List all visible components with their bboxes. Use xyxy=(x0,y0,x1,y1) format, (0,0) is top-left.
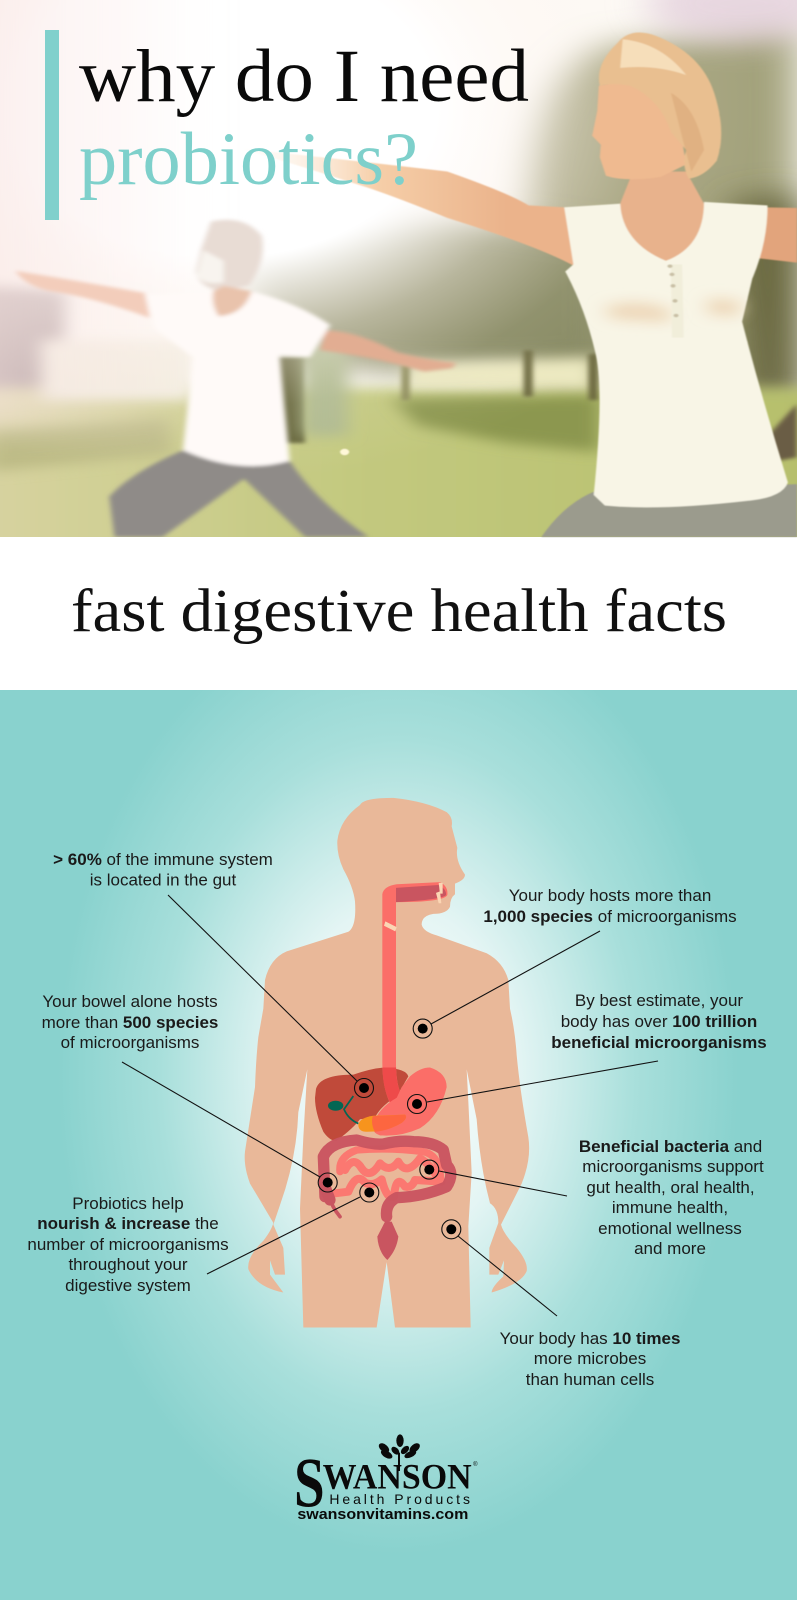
fact: 100 trillion: beneficial microorganisms xyxy=(551,1033,767,1052)
human body illustration xyxy=(245,798,529,1327)
logo: Swanson Health Products: Health Products xyxy=(329,1491,470,1507)
pancreas xyxy=(358,1115,406,1132)
fact: 10 times microbes: more microbes xyxy=(534,1349,646,1368)
rectum xyxy=(377,1222,398,1260)
marker targets xyxy=(318,1019,461,1239)
heading: probiotics?: probiotics? xyxy=(79,118,418,201)
fact: beneficial bacteria: and more xyxy=(634,1239,706,1258)
photo background: grass and trees xyxy=(0,17,797,537)
panel: digestive health diagram xyxy=(0,690,797,1600)
fact: beneficial bacteria: gut health, oral health, xyxy=(586,1178,755,1197)
fact: beneficial bacteria: microorganisms support xyxy=(582,1157,764,1176)
liver xyxy=(315,1067,408,1141)
fact: 1,000 species: Your body hosts more than xyxy=(509,886,711,905)
fact: 10 times microbes: than human cells xyxy=(526,1370,654,1389)
logo: Swanson Health Products: WANSON xyxy=(323,1456,472,1496)
esophagus and mouth xyxy=(382,882,447,1103)
logo: Swanson Health Products xyxy=(294,1434,478,1523)
fact: bowel species: more than 500 species xyxy=(42,1013,218,1032)
small intestine xyxy=(335,1149,442,1197)
fact: 100 trillion: body has over 100 trillion xyxy=(561,1012,757,1031)
fact: probiotics help: number of microorganisms xyxy=(27,1235,229,1254)
fact: beneficial bacteria: Beneficial bacteria and xyxy=(579,1137,762,1156)
teeth and cartilage accents xyxy=(384,883,443,931)
logo: Swanson Health Products: ® xyxy=(473,1461,478,1468)
gallbladder xyxy=(328,1096,358,1124)
fact: beneficial bacteria: immune health, xyxy=(612,1198,728,1217)
accent bar xyxy=(45,30,59,220)
body silhouette xyxy=(245,798,529,1327)
fact: 10 times microbes: Your body has 10 times xyxy=(500,1329,680,1348)
fact: probiotics help: nourish & increase the xyxy=(37,1214,219,1233)
stomach xyxy=(372,1067,447,1136)
fact: 100 trillion: By best estimate, your xyxy=(575,991,743,1010)
fact: probiotics help: Probiotics help xyxy=(72,1194,184,1213)
fact: 1,000 species: 1,000 species of microorganisms xyxy=(483,907,737,926)
heading: why do I need: why do I need xyxy=(79,35,529,118)
fact: beneficial bacteria: emotional wellness xyxy=(598,1219,742,1238)
logo: Swanson Health Products: S xyxy=(294,1444,325,1523)
subheading: fast digestive health facts: fast digestive health facts xyxy=(71,578,727,645)
callout lines xyxy=(122,895,658,1316)
fact: immune system: is located in the gut xyxy=(90,870,237,890)
man figure xyxy=(15,220,456,537)
fact: immune system: > 60% of the immune system xyxy=(53,850,273,869)
fact: probiotics help: digestive system xyxy=(65,1276,191,1295)
colon xyxy=(323,1140,451,1217)
fact: bowel species: Your bowel alone hosts xyxy=(42,992,218,1011)
panel: hero photo of couple doing yoga outdoors xyxy=(0,0,797,609)
fact: bowel species: of microorganisms xyxy=(61,1033,199,1052)
logo leaves xyxy=(377,1434,422,1471)
logo: Swanson Health Products: swansonvitamins.com xyxy=(297,1507,468,1523)
sun glow overlay xyxy=(0,0,629,442)
fact: probiotics help: throughout your xyxy=(68,1255,188,1274)
intestines xyxy=(323,1140,451,1260)
woman figure xyxy=(239,33,797,537)
